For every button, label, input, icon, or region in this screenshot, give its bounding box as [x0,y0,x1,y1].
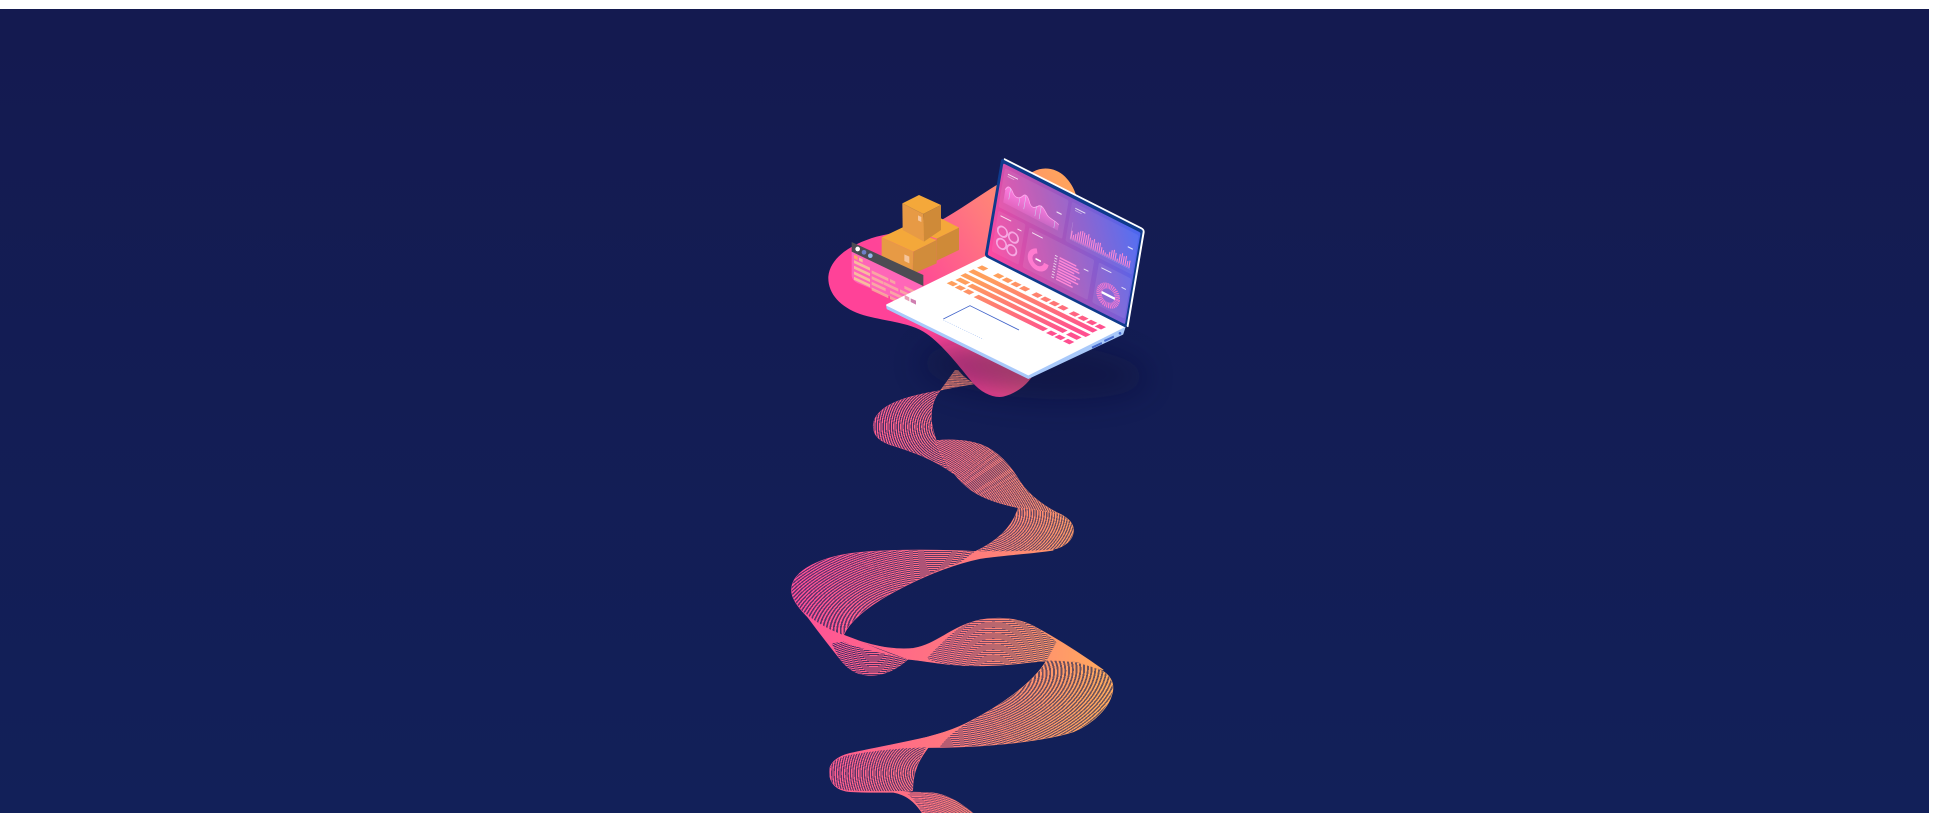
ribbon lobe: upper left [873,391,953,473]
screen display [988,163,1141,324]
side ports [1092,332,1121,349]
key row 1 [976,265,1107,330]
top box [902,195,941,242]
ribbon lobe: small lower left [803,612,908,676]
screen rim [988,159,1144,326]
window body [852,251,923,301]
ribbon wave [792,370,1113,816]
panel: bar chart [1065,202,1139,275]
front box [882,227,937,274]
window overlap squares [905,295,916,305]
laptop shadow [918,334,1148,406]
screen bezel [985,158,1144,328]
laptop base edge [887,305,1125,378]
long key bars [945,269,1099,345]
panel: donut and list [1023,227,1094,300]
keyboard [945,265,1107,345]
laptop scene [828,158,1148,406]
browser window [852,242,923,314]
panel: area chart [998,168,1069,239]
ribbon lobe: large right [893,661,1113,747]
laptop [887,158,1144,378]
window title bar [852,242,923,286]
ribbon lobe: upper right [975,508,1073,552]
ribbon lobe: upper diagonal [935,440,1063,516]
window controls [855,247,873,258]
back box [903,218,959,261]
blob backdrop [828,169,1113,397]
laptop base top [887,257,1125,374]
laptop screen [985,158,1144,328]
key row 5 [946,281,1075,344]
ribbon neck [940,370,975,391]
ribbon lobe: lower left [829,732,947,792]
cardboard boxes [882,195,959,274]
ribbon lobe: middle crossing [843,618,1103,670]
window rows [854,255,921,314]
touchpad [943,306,1019,339]
panel: ring charts [992,211,1026,265]
ribbon lobe: large left [792,550,1053,635]
panel: radial chart [1092,262,1131,319]
ribbon lobe: bottom tail [886,792,974,813]
